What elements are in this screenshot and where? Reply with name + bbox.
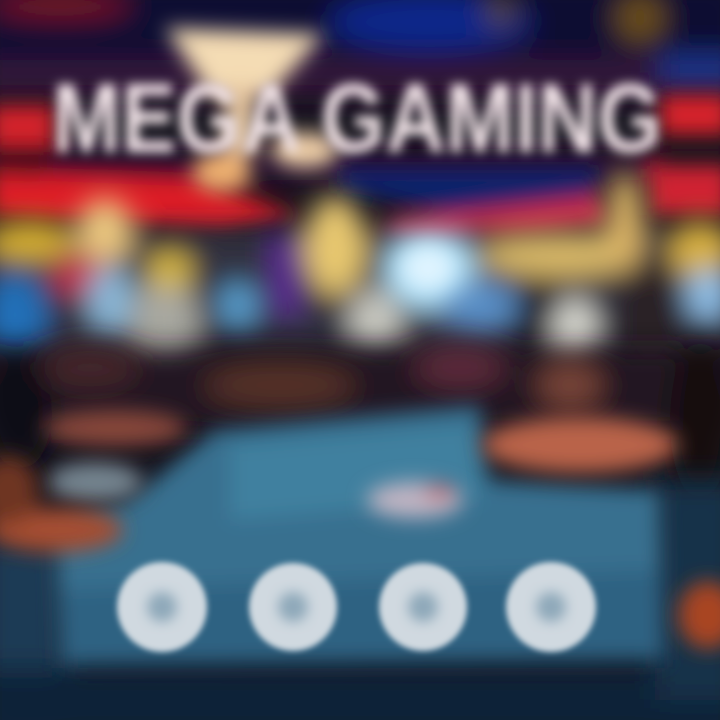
martini-shaped light above sign xyxy=(165,28,339,192)
panel: blue gaming table xyxy=(55,405,665,665)
base lower area xyxy=(0,480,720,720)
chip 3 xyxy=(379,563,467,651)
chip 2 xyxy=(249,563,337,651)
chip 1 xyxy=(117,562,207,652)
crowd and slot machines mid band xyxy=(0,170,720,380)
sign band and stage colours xyxy=(0,95,720,245)
bright highlight in centre xyxy=(402,246,454,290)
chip 4 xyxy=(506,562,596,652)
players' arms xyxy=(0,410,720,649)
cards on table xyxy=(47,462,463,518)
ceiling lights and colour xyxy=(0,0,720,95)
players around table xyxy=(0,340,720,500)
